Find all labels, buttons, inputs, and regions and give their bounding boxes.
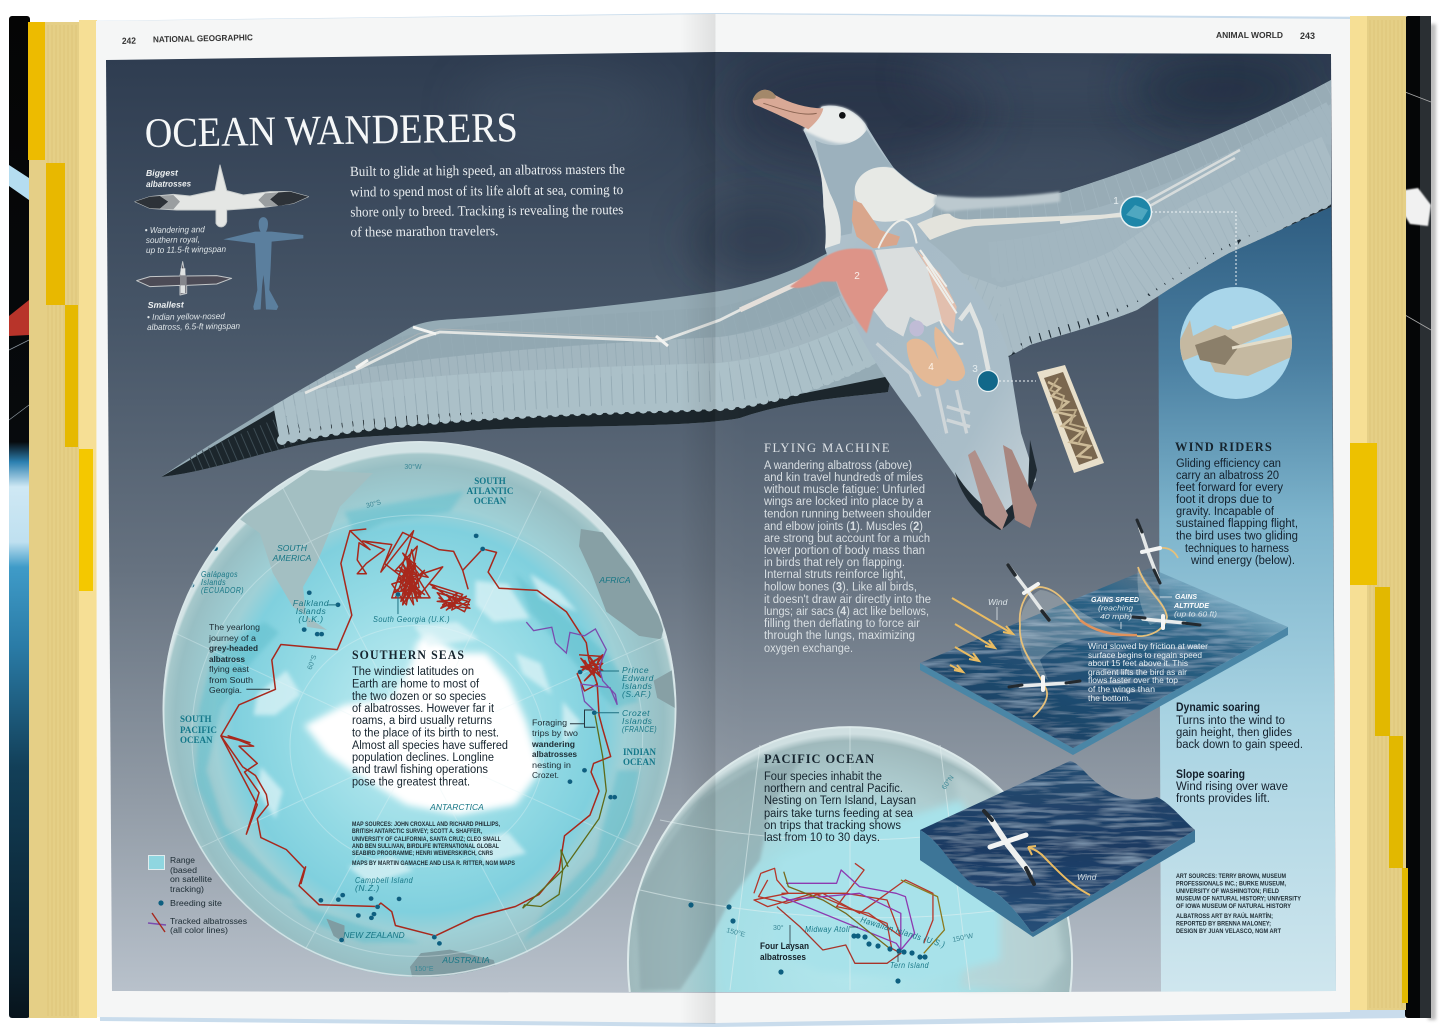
text: pacific ocean: pairs take turns feeding at sea	[764, 808, 914, 820]
mid rows	[285, 290, 880, 398]
land: africa	[579, 529, 675, 708]
panel: wind riders blue background	[1158, 205, 1336, 993]
page header: left: NATIONAL GEOGRAPHIC	[153, 32, 253, 44]
purple track: wandering albatross	[526, 622, 617, 712]
text: size comparison labels: Smallest	[148, 299, 185, 310]
text: flying machine: FLYING MACHINE	[764, 441, 891, 455]
text: pacific ocean: last from 10 to 30 days.	[764, 832, 880, 844]
text: pacific ocean: Nesting on Tern Island, Laysan	[764, 795, 916, 807]
arm root over shoulder	[934, 192, 1060, 212]
text: flying machine: and elbow joints (1). Muscles (2)	[764, 521, 923, 533]
right wing	[926, 80, 1331, 357]
antarctica	[305, 632, 541, 815]
text: yearlong journey note: journey of a	[208, 633, 256, 643]
diagram: slope soaring slab	[920, 761, 1195, 937]
land: asia and north america	[636, 760, 800, 990]
page header: right: ANIMAL WORLD	[1216, 30, 1283, 40]
text: southern seas: roams, a bird usually returns	[352, 715, 492, 727]
map labels: oceans and lands: (ECUADOR)	[201, 585, 244, 595]
human scale silhouette	[223, 217, 303, 310]
map sources credit: SEABIRD PROGRAMME; HENRI WEIMERSKIRCH, CNRS	[352, 850, 494, 857]
dynamic soaring labels: Wind slowed by friction at water	[1088, 642, 1208, 651]
text: size comparison labels: • Indian yellow-nosed	[147, 311, 225, 322]
map labels: oceans and lands: (U.K.)	[298, 614, 324, 624]
diagram: slope soaring slab: Wind	[1077, 872, 1097, 882]
text: dynamic soaring: Dynamic soaring	[1176, 702, 1260, 714]
map labels: oceans and lands: Falkland	[293, 598, 329, 608]
map labels: oceans and lands: (N.Z.)	[355, 883, 380, 893]
left wing bone over body	[739, 280, 800, 312]
flight path ribbons	[1020, 548, 1178, 717]
text: southern seas: The windiest latitudes on	[352, 666, 474, 678]
text: southern seas: and trawl fishing operations	[352, 764, 488, 776]
page header: left: 242	[122, 36, 136, 46]
muscle 2	[790, 249, 888, 333]
map labels: oceans and lands: Crozet	[622, 708, 650, 718]
map labels: oceans and lands: Islands	[296, 606, 326, 616]
text: southern seas: Almost all species have suffered	[352, 740, 508, 752]
map labels: oceans and lands: ATLANTIC	[467, 486, 513, 496]
title: OCEAN WANDERERS	[144, 105, 518, 157]
text: flying machine: are strong but account for a much	[764, 533, 930, 545]
pacific tracks	[754, 863, 944, 963]
legend	[148, 855, 247, 935]
art sources credit: ART SOURCES: TERRY BROWN, MUSEUM	[1176, 873, 1286, 880]
text: wind riders: foot it drops due to	[1176, 494, 1272, 506]
covert rows	[1060, 80, 1331, 193]
pacific map labels: 150°E	[725, 926, 746, 939]
text: size comparison labels	[144, 167, 240, 332]
text: wind riders: sustained flapping flight,	[1176, 518, 1298, 530]
text: wind riders: WIND RIDERS	[1175, 439, 1273, 454]
right cover edge	[1405, 16, 1431, 1018]
callout circle 1: 1	[1113, 196, 1119, 207]
dynamic soaring labels: surface begins to regain speed	[1088, 651, 1202, 660]
text: wind riders: wind energy (below).	[1190, 555, 1295, 567]
globe: pacific ocean map	[628, 727, 1072, 992]
map base drawn in local coordinates	[166, 470, 675, 984]
text: foraging trips note: albatrosses	[532, 749, 577, 759]
text: wind riders: the bird uses two gliding	[1176, 530, 1298, 542]
flight feathers	[276, 331, 890, 420]
white neck stripe	[815, 152, 841, 248]
text: size comparison labels: up to 11.5-ft wingspan	[146, 244, 226, 255]
text: intro paragraph	[350, 163, 626, 240]
text: flying machine: lungs; air sacs (4) act like bellows,	[764, 606, 929, 618]
art sources credit: ALBATROSS ART BY RAÚL MARTÍN;	[1176, 911, 1273, 920]
text: pacific ocean: on trips that tracking shows	[764, 820, 901, 832]
legend: Range	[170, 855, 195, 865]
text: dynamic soaring: back down to gain speed.	[1176, 739, 1303, 751]
dynamic soaring labels: (reaching	[1098, 604, 1134, 612]
text: pacific ocean	[764, 751, 916, 844]
text: slope soaring: Wind rising over wave	[1176, 781, 1288, 793]
text: wind riders: carry an albatross 20	[1176, 470, 1279, 482]
map labels: oceans and lands: 30°S	[365, 498, 382, 510]
pacific map labels: Four Laysan	[760, 941, 809, 951]
map labels: oceans and lands: Islands	[201, 577, 226, 587]
small bird icon: biggest albatrosses	[135, 165, 308, 227]
map labels: oceans and lands: Galápagos	[201, 569, 238, 579]
text: intro paragraph: shore only to breed. Tracking is revealing the routes	[350, 203, 623, 220]
dark primaries and trailing edge	[161, 376, 890, 480]
map sources credit: UNIVERSITY OF CALIFORNIA, SANTA CRUZ; CLEO SMALL	[352, 836, 501, 843]
dynamic soaring labels: about 15 feet above it. This	[1088, 659, 1188, 668]
inset: hollow bone section	[1037, 365, 1104, 473]
art sources credit: UNIVERSITY OF WASHINGTON; FIELD	[1176, 888, 1279, 895]
text: size comparison labels: albatross, 6.5-ft wingspan	[147, 321, 240, 332]
map labels: oceans and lands: South Georgia (U.K.)	[373, 614, 450, 624]
text: size comparison labels: southern royal,	[146, 234, 200, 245]
red track: grey-headed albatross	[221, 529, 611, 936]
map labels: oceans and lands: SOUTH	[474, 476, 506, 486]
skeleton and keel	[852, 200, 988, 433]
legend: tracking)	[170, 884, 204, 894]
text: wind riders	[1175, 439, 1298, 567]
inset: wing joint	[1180, 287, 1296, 399]
map sources credit: BRITISH ANTARCTIC SURVEY; SCOTT A. SHAFFER,	[352, 828, 482, 835]
range darker band	[195, 491, 639, 943]
land: south america	[239, 470, 373, 630]
map labels: oceans and lands: NEW ZEALAND	[343, 930, 405, 940]
map sources credit	[352, 821, 516, 867]
map labels: oceans and lands: INDIAN	[623, 747, 657, 757]
pacific map labels: albatrosses	[760, 952, 806, 962]
dynamic soaring labels: flows faster over the top	[1088, 676, 1179, 685]
map labels: oceans and lands: SOUTH	[277, 543, 308, 553]
pacific breeding dots	[688, 902, 928, 984]
wing bone at shoulder	[917, 214, 1125, 240]
text: flying machine	[763, 441, 931, 655]
white shoulder patch	[855, 167, 937, 222]
green track: wandering albatross	[523, 713, 606, 908]
neck grey	[815, 130, 893, 237]
text: pacific ocean: PACIFIC OCEAN	[764, 751, 875, 766]
map labels: oceans and lands: Islands	[622, 681, 653, 691]
text: flying machine: A wandering albatross (above)	[764, 460, 912, 472]
text: intro paragraph: wind to spend most of its life aloft at sea, coming to	[350, 183, 623, 200]
callout circle 1	[1113, 196, 1152, 228]
art sources credit: OF IOWA MUSEUM OF NATURAL HISTORY	[1176, 903, 1292, 910]
pacific map labels: Tern Island	[890, 960, 929, 970]
text: foraging trips note: Crozet.	[532, 770, 559, 780]
map labels: oceans and lands: 60°S	[306, 653, 319, 671]
map labels: oceans and lands: OCEAN	[474, 496, 507, 506]
art sources credit: DESIGN BY JUAN VELASCO, NGM ART	[1176, 928, 1281, 935]
head and beak	[753, 90, 846, 129]
dynamic soaring labels: GAINS	[1175, 592, 1197, 601]
text: flying machine: without muscle fatigue: Unfurled	[763, 484, 925, 496]
text: pacific ocean: northern and central Pacific.	[764, 783, 903, 795]
grid	[166, 488, 675, 977]
dynamic soaring labels: gradient lifts the bird as air	[1088, 668, 1187, 677]
pacific map labels: Hawaiian Islands (U.S.)	[859, 914, 946, 950]
pacific map labels	[725, 774, 974, 970]
callout circle 3: 3	[972, 364, 978, 375]
text: size comparison labels: Biggest	[146, 168, 179, 178]
callout circle 3	[972, 364, 998, 392]
dynamic soaring labels: GAINS SPEED	[1091, 595, 1140, 604]
legend: (based	[170, 865, 197, 875]
wind arrows	[950, 598, 1013, 672]
text: yearlong journey note: from South	[209, 675, 253, 685]
callout leader lines	[246, 594, 619, 727]
page header: left	[122, 32, 253, 46]
text: flying machine: through the lungs, maximizing	[764, 630, 915, 642]
text: dynamic soaring: Turns into the wind to	[1176, 715, 1285, 727]
legend: Breeding site	[170, 898, 222, 908]
dynamic soaring labels: the bottom.	[1088, 694, 1131, 703]
text: dynamic soaring: gain height, then glides	[1176, 727, 1292, 739]
text: slope soaring: fronts provides lift.	[1176, 793, 1270, 805]
map labels: oceans and lands: ANTARCTICA	[429, 802, 484, 812]
map labels: oceans and lands: OCEAN	[623, 757, 656, 767]
text: flying machine: wings are locked into place by a	[763, 496, 924, 508]
art sources credit	[1176, 873, 1302, 935]
text: flying machine: hollow bones (3). Like all birds,	[764, 582, 917, 594]
text: foraging trips note: Foraging	[532, 718, 567, 728]
text: intro paragraph: of these marathon travelers.	[350, 224, 499, 240]
text: yearlong journey note: grey-headed	[209, 643, 258, 653]
map sources credit: MAPS BY MARTIN GAMACHE AND LISA R. RITTER, NGM MAPS	[352, 860, 516, 867]
text: size comparison labels: albatrosses	[146, 178, 191, 189]
pacific map labels: 30°	[773, 924, 784, 932]
map labels: oceans and lands: AUSTRALIA	[441, 955, 490, 965]
tail and feet	[955, 440, 1037, 530]
text: slope soaring	[1176, 769, 1288, 805]
map labels: oceans and lands: AMERICA	[272, 553, 312, 563]
dynamic soaring labels	[988, 592, 1218, 703]
text: flying machine: tendon running between shoulder	[764, 508, 931, 520]
text: flying machine: in birds that rely on flapping.	[764, 557, 905, 569]
text: yearlong journey note: albatross	[209, 654, 245, 664]
small bird icon: smallest	[137, 262, 232, 295]
text: size comparison labels: • Wandering and	[145, 224, 205, 235]
map labels: oceans and lands: AFRICA	[598, 575, 631, 585]
text: foraging trips note: wandering	[531, 739, 575, 749]
map labels: oceans and lands: PACIFIC	[180, 725, 217, 735]
text: foraging trips note: nesting in	[532, 760, 571, 770]
map sources credit: MAP SOURCES: JOHN CROXALL AND RICHARD PHILLIPS,	[352, 821, 500, 828]
map labels: oceans and lands: Islands	[622, 716, 653, 726]
text: pacific ocean: Four species inhabit the	[764, 771, 882, 783]
left wing bones	[304, 308, 740, 394]
panel: sky background	[100, 45, 1340, 995]
text: yearlong journey note: flying east	[209, 664, 250, 674]
air sacs 4: 4	[928, 362, 934, 373]
globe: southern seas map	[162, 441, 676, 984]
text: flying machine: it doesn't draw air directly into the	[764, 594, 931, 606]
text: slope soaring: Slope soaring	[1176, 769, 1245, 781]
legend: Tracked albatrosses	[170, 916, 247, 926]
left wing	[161, 240, 905, 480]
muscle 2: 2	[854, 271, 860, 282]
text: southern seas: population declines. Longline	[352, 752, 494, 764]
legend: on satellite	[170, 874, 212, 884]
text: flying machine: lower portion of body mass than	[764, 545, 925, 557]
dynamic soaring labels: ALTITUDE	[1173, 601, 1210, 610]
sea ice patches	[254, 574, 581, 884]
text: flying machine: filling then deflating to force air	[764, 618, 920, 630]
text: southern seas: of albatrosses. However far it	[352, 703, 495, 715]
text: foraging trips note: trips by two	[532, 728, 578, 738]
map labels: oceans and lands	[180, 463, 657, 973]
text: flying machine: oxygen exchange.	[764, 643, 853, 655]
gliding albatrosses	[1008, 520, 1200, 690]
art sources credit: REPORTED BY BRENNA MALONEY;	[1176, 920, 1271, 928]
map labels: oceans and lands: (S.AF.)	[622, 689, 651, 699]
art sources credit: PROFESSIONALS INC.; BURKE MUSEUM,	[1176, 880, 1286, 888]
text: wind riders: gravity. Incapable of	[1176, 506, 1275, 518]
pacific map labels: Midway Atoll	[805, 924, 851, 934]
dynamic soaring labels: of the wings than	[1088, 685, 1155, 694]
dynamic soaring labels: 40 mph)	[1100, 612, 1133, 621]
text: wind riders: Gliding efficiency can	[1176, 458, 1281, 470]
right page block: yellow edges	[1350, 16, 1408, 1010]
map labels: oceans and lands: 30°W	[404, 463, 422, 471]
dynamic soaring labels: Wind	[988, 597, 1008, 607]
map labels: oceans and lands: Prince	[622, 665, 649, 675]
map labels: oceans and lands: OCEAN	[180, 735, 213, 745]
pacific map labels: 150°W	[952, 932, 974, 944]
map labels: oceans and lands: Campbell Island	[355, 875, 413, 885]
text: southern seas: SOUTHERN SEAS	[352, 647, 465, 662]
text: wind riders: feet forward for every	[1176, 482, 1283, 494]
land: australia and new zealand	[326, 918, 496, 977]
text: foraging trips note	[531, 718, 578, 780]
text: southern seas: pose the greatest threat.	[352, 776, 470, 788]
text: southern seas	[352, 647, 508, 788]
text: southern seas: Earth are home to most of	[352, 678, 480, 690]
text: yearlong journey note	[208, 622, 260, 695]
covert rows	[358, 339, 390, 356]
left cover edge	[9, 16, 30, 1018]
map labels: oceans and lands: SOUTH	[180, 714, 212, 724]
legend: (all color lines)	[170, 925, 228, 935]
text: yearlong journey note: The yearlong	[209, 622, 260, 632]
text: southern seas: to the place of its birth to nest.	[352, 728, 499, 740]
pacific map labels: 60°N	[940, 774, 956, 791]
breeding site dots	[189, 533, 617, 946]
right wing bones and tendon	[1145, 150, 1240, 207]
dynamic soaring labels: (up to 60 ft)	[1174, 610, 1218, 618]
map labels: oceans and lands: Edward	[622, 673, 654, 683]
body	[803, 106, 1060, 528]
art sources credit: MUSEUM OF NATURAL HISTORY; UNIVERSITY	[1176, 896, 1302, 902]
page header: right: 243	[1300, 31, 1315, 41]
wind arrow	[1028, 846, 1090, 895]
text: flying machine: Internal struts reinforce light,	[764, 569, 906, 581]
map sources credit: AND BEN SULLIVAN, BIRDLIFE INTERNATIONAL GLOBAL	[352, 843, 499, 850]
flight feathers	[940, 167, 1335, 322]
air sacs 4	[907, 327, 965, 387]
text: wind riders: techniques to harness	[1185, 543, 1289, 555]
map labels: oceans and lands: 150°E	[414, 965, 434, 973]
albatross illustration	[161, 80, 1345, 530]
page header: right	[1216, 30, 1315, 41]
text: dynamic soaring	[1176, 702, 1303, 751]
diagram: dynamic soaring slab	[920, 520, 1288, 755]
text: intro paragraph: Built to glide at high speed, an albatross masters the	[350, 163, 625, 180]
soaring albatross	[984, 811, 1034, 884]
text: flying machine: and kin travel hundreds of miles	[764, 472, 923, 484]
text: southern seas: the two dozen or so species	[352, 691, 486, 703]
left page block: yellow edges	[28, 20, 97, 1018]
map labels: oceans and lands: (FRANCE)	[622, 724, 657, 734]
text: yearlong journey note: Georgia.	[209, 685, 242, 695]
head	[803, 106, 867, 144]
